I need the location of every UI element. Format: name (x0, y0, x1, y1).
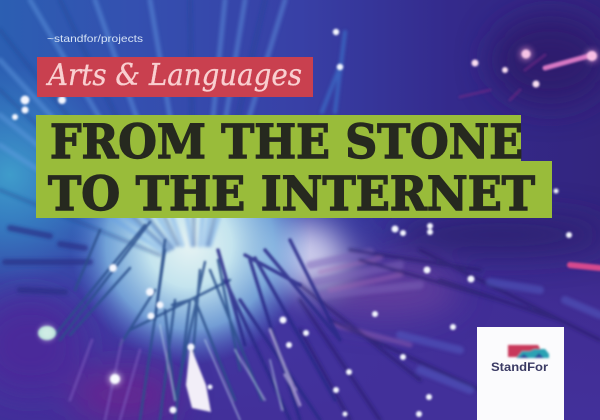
logo: StandFor: StandFor (491, 360, 548, 374)
category banner: Arts & Languages: Arts & Languages (45, 58, 302, 93)
website label: ~standfor/projects (47, 33, 143, 45)
logo mark (508, 345, 549, 358)
title: From the Stone to the Internet: FROM THE STONE (50, 115, 523, 170)
title: From the Stone to the Internet (36, 115, 552, 222)
logo: StandFor (477, 327, 564, 420)
title: From the Stone to the Internet: TO THE INTERNET (48, 167, 535, 222)
